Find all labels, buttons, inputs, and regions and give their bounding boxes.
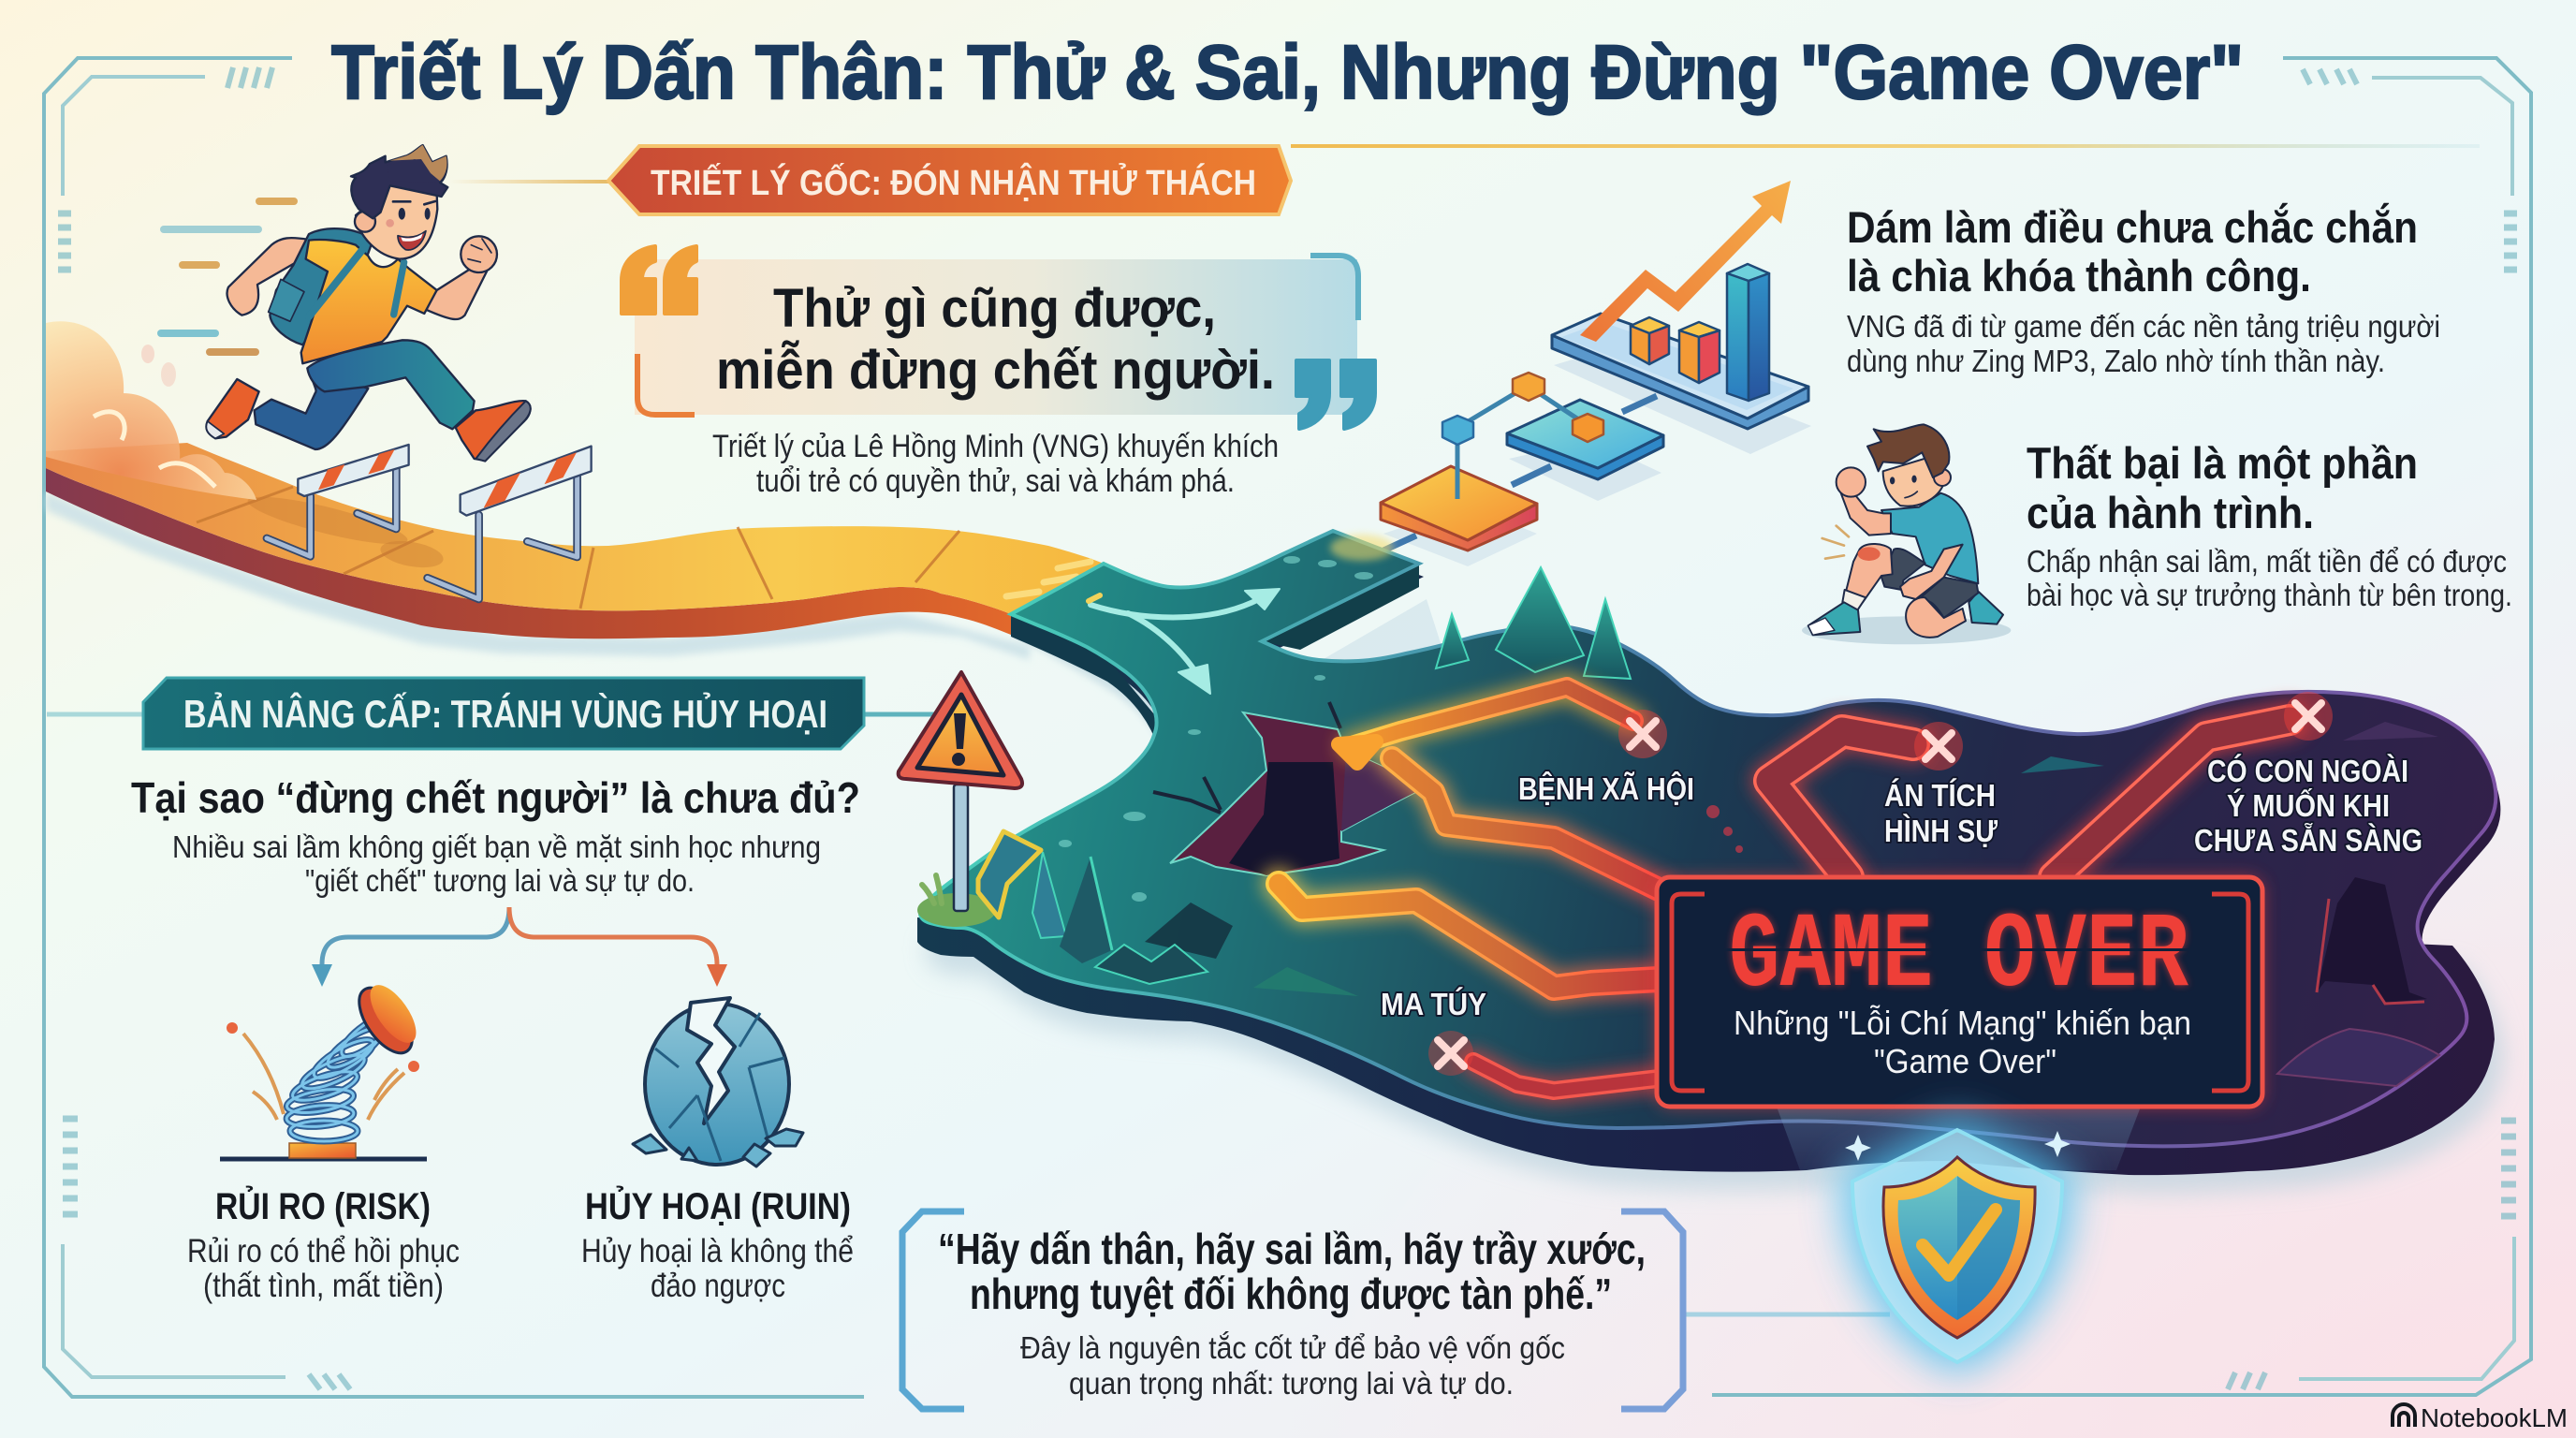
x markers [1428,692,2333,1076]
failure heading and text: Thất bại là một phần [2027,438,2418,488]
risk label and text [187,1184,460,1304]
why heading and text [131,773,860,898]
teal banner text: BẢN NÂNG CẤP: TRÁNH VÙNG HỦY HOẠI [183,691,827,736]
why heading and text: Tại sao “đừng chết người” là chưa đủ? [131,773,860,822]
game over caption: "Game Over" [1874,1042,2056,1080]
game over panel [1657,877,2262,1107]
hurdle 1 [267,445,409,556]
runner character [206,145,531,462]
quote panel [622,246,1375,429]
danger labels [1381,754,2422,1021]
icon: spring [220,977,427,1159]
growth arrow [1580,181,1791,342]
failure heading and text: Chấp nhận sai lầm, mất tiền để có được [2027,544,2507,579]
game over title: GAME OVER [1729,897,2188,1018]
quote text: miễn đừng chết người. [716,340,1275,401]
bottom quote panel [902,1211,1683,1409]
dust cloud [46,321,256,500]
risk label and text: RỦI RO (RISK) [215,1184,431,1227]
ruin label and text [581,1184,854,1304]
quote caption [712,429,1279,499]
fine connector lines [47,144,2480,714]
ruin label and text: Hủy hoại là không thể [581,1233,854,1269]
warning sign [899,672,1022,911]
node connectors and cubes [1442,373,1603,499]
rocks and hills [1032,722,2439,1086]
danger labels: CÓ CON NGOÀI [2207,754,2408,788]
chasm [1153,702,1425,875]
hurdle 2 [428,447,592,599]
road arrows [1089,589,1280,694]
danger labels: Ý MUỐN KHI [2227,787,2390,823]
grass tip and yellow crack rock [917,831,1041,927]
ruin label and text: đảo ngược [651,1268,785,1304]
closing quotation mark [1296,360,1375,429]
road: orange path [46,443,1104,660]
branching arrows [312,907,727,987]
icon: broken egg [633,998,803,1167]
bottom quote text: “Hãy dấn thân, hãy sai lầm, hãy trầy xước, [938,1225,1646,1273]
banner text: TRIẾT LÝ GỐC: ĐÓN NHẬN THỬ THÁCH [651,161,1256,203]
failure heading and text [2027,438,2512,612]
danger labels: HÌNH SỰ [1884,814,1998,848]
quote text [716,278,1275,401]
banner: original philosophy [608,146,1291,214]
failure heading and text: bài học và sự trưởng thành từ bên trong. [2027,578,2512,612]
game over caption: Những "Lỗi Chí Mạng" khiến bạn [1734,1004,2191,1042]
injured boy character [1802,424,2011,644]
success heading and text: VNG đã đi từ game đến các nền tảng triệu người [1847,309,2440,344]
failure heading and text: của hành trình. [2027,488,2314,537]
lava inner strokes [1279,687,2290,1091]
lava paths [1279,687,2290,1091]
danger labels: ÁN TÍCH [1884,778,1996,813]
bottom quote text: Đây là nguyên tắc cốt tử để bảo vệ vốn gốc [1020,1330,1565,1365]
risk label and text: Rủi ro có thể hồi phục [187,1233,460,1269]
ruin label and text: HỦY HOẠI (RUIN) [585,1184,851,1227]
success heading and text [1847,202,2440,378]
quote text: Thử gì cũng được, [773,278,1216,339]
teal banner [143,678,864,749]
bottom quote text: nhưng tuyệt đối không được tàn phế.” [970,1269,1612,1318]
growth chart isometric [1381,181,1811,566]
why heading and text: Nhiều sai lầm không giết bạn về mặt sinh học nhưng [172,829,821,864]
danger labels: CHƯA SẴN SÀNG [2194,823,2422,858]
quote caption: tuổi trẻ có quyền thử, sai và khám phá. [756,463,1235,499]
shield beam [1777,1107,2141,1170]
lower platform [1381,466,1537,550]
shield icon [1685,1130,2071,1362]
risk label and text: (thất tình, mất tiền) [203,1268,444,1304]
notebooklm watermark: NotebookLM [2421,1403,2568,1432]
speed lines [161,201,294,352]
danger land [917,531,2504,1194]
bottom quote text: quan trọng nhất: tương lai và tự do. [1069,1366,1514,1401]
success heading and text: dùng như Zing MP3, Zalo nhờ tính thần này. [1847,344,2385,378]
game over caption [1734,1004,2191,1080]
mountains [1436,567,1631,679]
danger labels: MA TÚY [1381,987,1486,1021]
quote caption: Triết lý của Lê Hồng Minh (VNG) khuyến khích [712,429,1279,464]
success heading and text: là chìa khóa thành công. [1847,251,2311,301]
game over title: GAME OVER [1729,897,2188,1018]
opening quotation mark [622,246,696,314]
bottom quote text [938,1225,1646,1401]
why heading and text: "giết chết" tương lai và sự tự do. [305,863,695,898]
middle platform [1507,400,1663,479]
title: Triết Lý Dấn Thân: Thử & Sai, Nhưng Đừng "Game Over" [331,30,2244,115]
lava edge strokes [1279,687,2290,1091]
success heading and text: Dám làm điều chưa chắc chắn [1847,202,2418,252]
danger labels: BỆNH XÃ HỘI [1518,770,1694,806]
chart bars [1631,264,1769,401]
